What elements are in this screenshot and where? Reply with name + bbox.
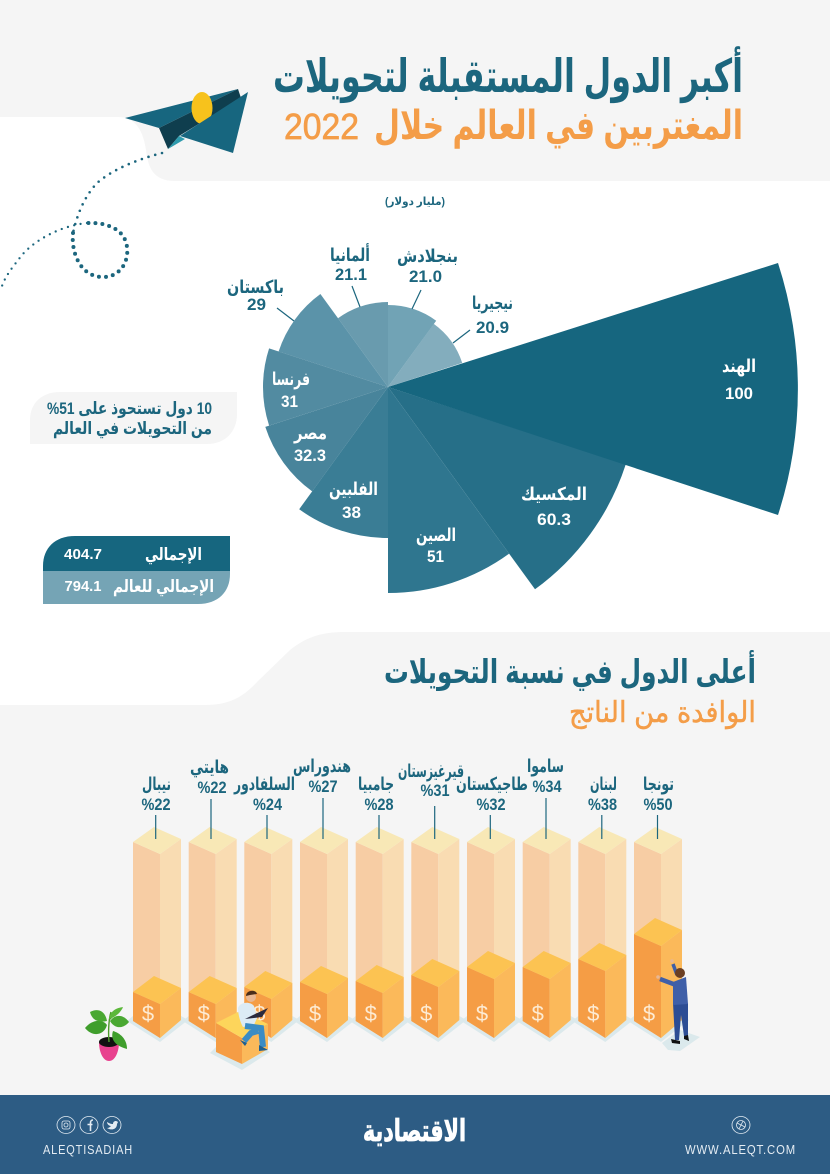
label: Honduras: %27 (308, 777, 338, 796)
bar: Kyrgyzstan: $ (420, 1001, 432, 1026)
callout: 10 countries share (30, 392, 237, 444)
totals box: الإجمالي للعالم (113, 577, 214, 597)
label: Gambia: جامبيا (358, 774, 394, 794)
label: Pakistan: 29 (247, 295, 266, 314)
globe icon (732, 1116, 750, 1134)
bar: Samoa: $ (532, 1001, 544, 1026)
label: Philippines: الفلبين (329, 479, 378, 500)
label: Egypt (293, 423, 327, 465)
bar: Gambia: $ (365, 1001, 377, 1026)
sector: Germany (338, 302, 388, 387)
label: Kyrgyzstan: قيرغيزستان (398, 761, 464, 782)
label: Nepal (142, 774, 171, 839)
label: Nigeria: نيجيريا (472, 293, 513, 314)
isometric bar chart (127, 827, 689, 1042)
sector: China (388, 387, 509, 593)
label: Pakistan: باكستان (227, 277, 284, 297)
label: Lebanon: %38 (588, 795, 617, 814)
bar: Tonga (628, 827, 689, 1042)
total row (43, 536, 230, 571)
bar: Kyrgyzstan (405, 827, 466, 1042)
label: Tonga (643, 774, 674, 839)
label: Samoa: ساموا (527, 756, 564, 777)
bar: Haiti (183, 827, 244, 1042)
bar: Honduras: $ (309, 1001, 321, 1026)
bar: El Salvador: $ (253, 1001, 265, 1026)
sector: Nigeria (388, 324, 462, 387)
label: Tajikistan: %32 (476, 795, 506, 814)
bar labels (142, 756, 674, 839)
label: Mexico: المكسيك (521, 484, 587, 504)
label: Tajikistan: طاجيكستان (456, 774, 528, 794)
bar: Nepal: $ (142, 1001, 154, 1026)
label: Egypt: مصر (293, 423, 327, 444)
label: China (416, 525, 456, 566)
label: China: 51 (427, 547, 444, 566)
sector: India (388, 263, 798, 515)
label: Philippines: 38 (342, 503, 361, 522)
label: France: 31 (281, 392, 298, 411)
label: Germany (330, 243, 370, 284)
bar: Honduras (294, 827, 355, 1042)
label: Honduras: هندوراس (293, 756, 351, 777)
sector: Pakistan (279, 294, 388, 387)
label: Haiti: هايتي (190, 757, 229, 778)
main title (273, 46, 743, 149)
sector: Philippines (299, 387, 388, 538)
unit note: (مليار دولار) (385, 196, 445, 208)
icon: dotted flight path (2, 153, 162, 286)
icon: standing man pointing at bar (656, 959, 700, 1051)
sector: France (263, 348, 388, 426)
label: Tonga: تونجا (643, 774, 674, 795)
header background panel (0, 0, 830, 181)
label: Kyrgyzstan: %31 (420, 781, 450, 800)
handle: ALEQTISADIAH (43, 1142, 133, 1157)
section heading (384, 650, 756, 729)
totals box: 404.7 (64, 546, 102, 563)
brand logo: الاقتصادية (363, 1115, 466, 1148)
totals box: الإجمالي (145, 545, 202, 565)
label: Mexico (521, 484, 587, 529)
sector: Bangladesh (388, 305, 436, 387)
label: India: الهند (722, 356, 756, 377)
label: Haiti (190, 757, 229, 839)
label: El Salvador: %24 (253, 795, 282, 814)
label: Samoa (527, 756, 564, 839)
polar chart: remittances by country (227, 243, 798, 593)
label: Honduras (293, 756, 351, 839)
label: Nigeria: 20.9 (476, 318, 509, 337)
world total row (43, 571, 230, 604)
label: France (272, 369, 310, 411)
label: Nepal: %22 (142, 795, 170, 814)
icon: paper plane with coin (125, 89, 248, 153)
label: Egypt: 32.3 (294, 446, 326, 465)
label: Tonga: %50 (644, 795, 672, 814)
label: Mexico: 60.3 (537, 510, 571, 529)
sector: Mexico (388, 387, 626, 589)
label: France: فرنسا (272, 369, 310, 390)
callout: 10 countries share: من التحويلات في العالم (53, 419, 212, 439)
section heading: الوافدة من الناتج (569, 697, 756, 729)
label: Kyrgyzstan (398, 761, 464, 839)
lower section background panel (0, 632, 830, 1096)
totals box: 794.1 (64, 578, 102, 595)
website: WWW.ALEQT.COM (685, 1142, 796, 1157)
label: Nigeria (472, 293, 513, 337)
icon: potted plant (85, 1007, 129, 1061)
label: India: 100 (725, 384, 753, 403)
bar: Gambia (350, 827, 411, 1042)
bar: Tonga: $ (643, 1001, 655, 1026)
label: Germany: ألمانيا (330, 243, 370, 265)
totals box (43, 536, 230, 604)
label: Germany: 21.1 (335, 265, 367, 284)
label: Philippines (329, 479, 378, 522)
label: Haiti: %22 (198, 778, 226, 797)
label: El Salvador: السلفادور (233, 774, 295, 795)
label: Bangladesh: 21.0 (409, 267, 442, 286)
bar: Tajikistan (461, 827, 522, 1042)
label: Gambia: %28 (364, 795, 394, 814)
bar: Nepal (127, 827, 188, 1042)
sector: Egypt (265, 387, 388, 491)
label: Lebanon (588, 774, 617, 839)
leader lines (277, 286, 470, 343)
label: Nepal: نيبال (142, 774, 171, 794)
bar: Haiti: $ (198, 1001, 210, 1026)
label: India (722, 356, 756, 403)
footer bar (0, 1095, 830, 1174)
label: Pakistan (227, 277, 284, 314)
main title: 2022 (284, 106, 359, 147)
bar: El Salvador (238, 827, 299, 1042)
label: Bangladesh (397, 246, 458, 286)
icon: seated man with laptop on box (210, 991, 270, 1070)
label: Lebanon: لبنان (590, 774, 617, 794)
social icons (57, 1116, 121, 1134)
bar: Lebanon: $ (587, 1001, 599, 1026)
label: Gambia (358, 774, 394, 839)
callout: 10 countries share: 10 دول تستحوذ على 51% (47, 399, 212, 419)
label: Tajikistan (456, 774, 528, 839)
bar: Tajikistan: $ (476, 1001, 488, 1026)
label: Bangladesh: بنجلادش (397, 246, 458, 266)
label: El Salvador (233, 774, 295, 839)
bar: Samoa (517, 827, 578, 1042)
label: China: الصين (416, 525, 456, 546)
label: Samoa: %34 (532, 777, 562, 796)
bar: Lebanon (572, 827, 633, 1042)
